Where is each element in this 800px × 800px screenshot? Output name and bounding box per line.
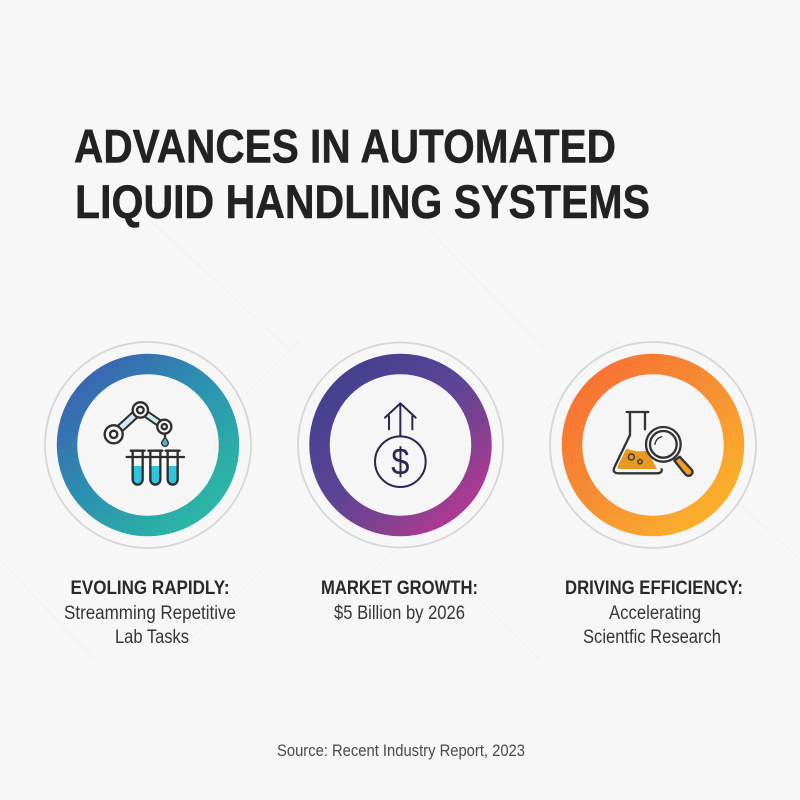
- ring: purple gradient: [298, 342, 503, 548]
- label: evolving rapidly: EVOLING RAPIDLY:: [70, 577, 230, 599]
- icon: robotic arm and test tubes: [105, 402, 184, 485]
- source note: Source: Recent Industry Report, 2023: [277, 742, 525, 760]
- label: driving efficiency: Scientfic Research: [583, 627, 721, 648]
- ring: teal blue gradient: [45, 342, 251, 548]
- icon: dollar coin with up arrows: $: [391, 440, 410, 483]
- icon: flask and magnifying glass: [614, 412, 693, 476]
- label: market growth: MARKET GROWTH:: [321, 577, 478, 599]
- title: [74, 120, 650, 229]
- panel: evolving rapidly: [45, 342, 251, 648]
- label: driving efficiency: DRIVING EFFICIENCY:: [565, 577, 743, 599]
- label: driving efficiency: Accelerating: [609, 603, 701, 624]
- panel: driving efficiency: [550, 342, 756, 648]
- title: ADVANCES IN AUTOMATED: [74, 120, 616, 174]
- label: evolving rapidly: Lab Tasks: [115, 627, 189, 648]
- icon: dollar coin with up arrows: [375, 403, 426, 487]
- label: market growth: [321, 577, 478, 624]
- label: evolving rapidly: Streamming Repetitive: [64, 603, 236, 624]
- label: market growth: $5 Billion by 2026: [334, 603, 465, 624]
- ring: orange gradient: [550, 342, 756, 548]
- label: driving efficiency: [565, 577, 743, 648]
- title: LIQUID HANDLING SYSTEMS: [75, 176, 650, 229]
- panel: market growth: [298, 342, 503, 624]
- label: evolving rapidly: [64, 577, 236, 648]
